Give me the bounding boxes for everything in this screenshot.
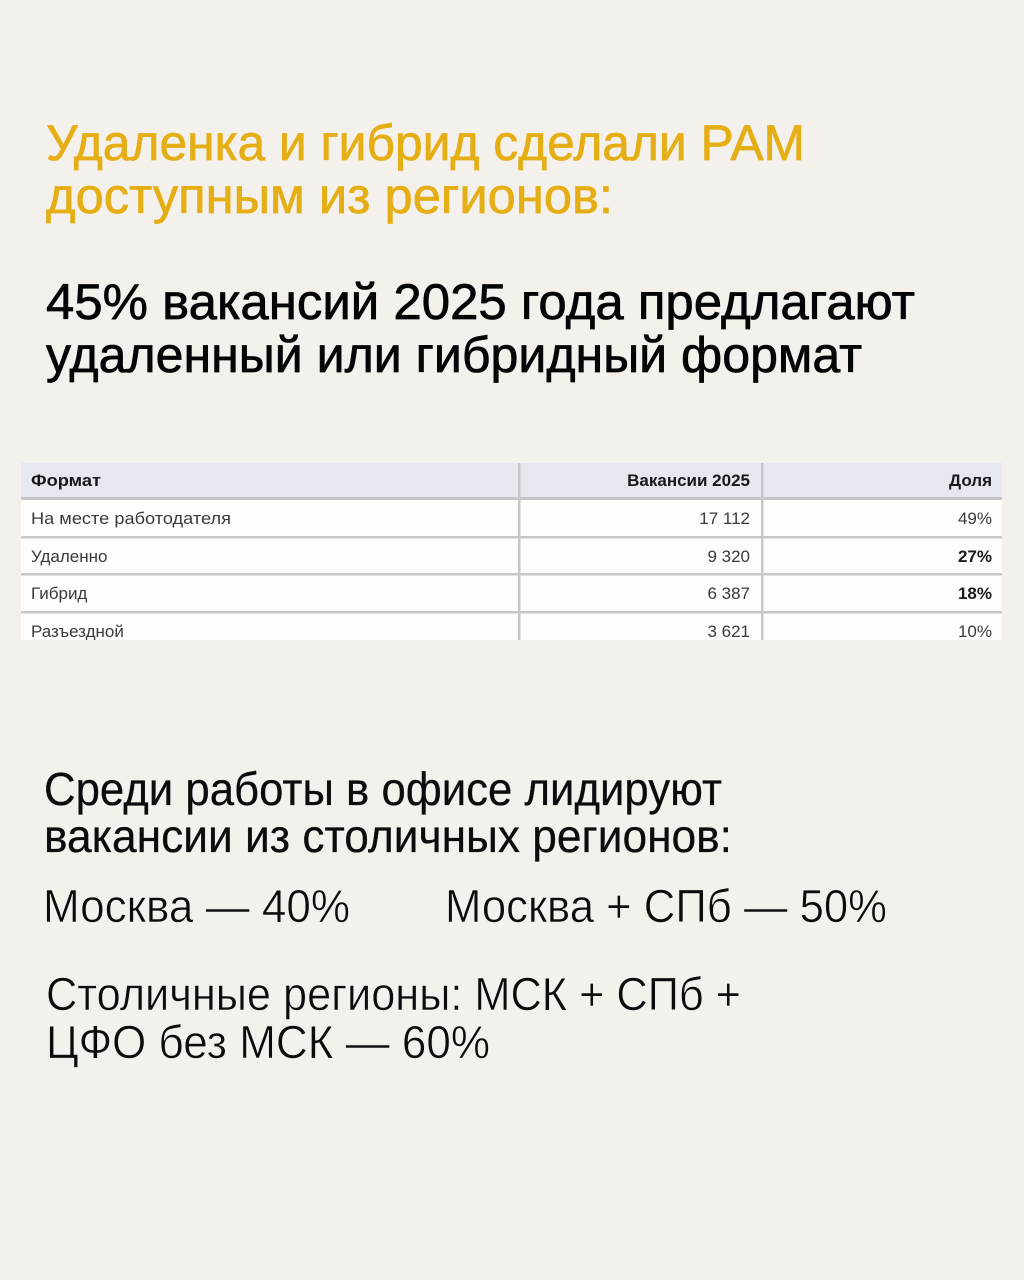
table header row: Формат — [31, 471, 101, 490]
text block: office vacancies: вакансии из столичных регионов: — [44, 810, 732, 862]
table row: traveling, clipped: 3 621 — [707, 622, 750, 641]
table row: on site: На месте работодателя — [31, 509, 231, 528]
table row: traveling, clipped: 10% — [958, 622, 992, 641]
stat: Moscow: Москва — 40% — [43, 880, 350, 932]
table row: remote — [31, 547, 992, 566]
table row: remote: Удаленно — [31, 547, 107, 566]
table row: on site: 17 112 — [699, 509, 750, 528]
table row: hybrid: 6 387 — [707, 584, 750, 603]
table row: hybrid: 18% — [958, 584, 992, 603]
table header row — [31, 471, 992, 490]
table: vacancies by work format — [0, 463, 1024, 648]
table row: on site: 49% — [958, 509, 992, 528]
heading: gold title: доступным из регионов: — [46, 168, 613, 224]
table row: remote: 9 320 — [707, 547, 750, 566]
stat: capital regions: ЦФО без МСК — 60% — [46, 1016, 490, 1068]
heading: gold title — [46, 115, 805, 224]
heading: black statement: удаленный или гибридный формат — [46, 327, 862, 383]
table row: traveling, clipped — [31, 622, 992, 641]
table row: on site — [31, 509, 992, 528]
stat: Moscow and Saint Petersburg: Москва + СПб — 50% — [445, 880, 887, 932]
table row: hybrid — [31, 584, 992, 603]
table header row: Доля — [949, 471, 992, 490]
text block: office vacancies: Среди работы в офисе лидируют — [44, 763, 722, 815]
text block: office vacancies — [44, 763, 732, 862]
heading: black statement: 45% вакансий 2025 года предлагают — [46, 274, 915, 330]
table row: hybrid: Гибрид — [31, 584, 87, 603]
table row: traveling, clipped: Разъездной — [31, 622, 124, 641]
table row: remote: 27% — [958, 547, 992, 566]
heading: gold title: Удаленка и гибрид сделали РАМ — [46, 115, 805, 171]
table header row: Вакансии 2025 — [627, 471, 750, 490]
stat: capital regions: Столичные регионы: МСК + СПб + — [46, 968, 741, 1020]
heading: black statement — [46, 274, 915, 383]
stat: capital regions — [46, 968, 741, 1068]
